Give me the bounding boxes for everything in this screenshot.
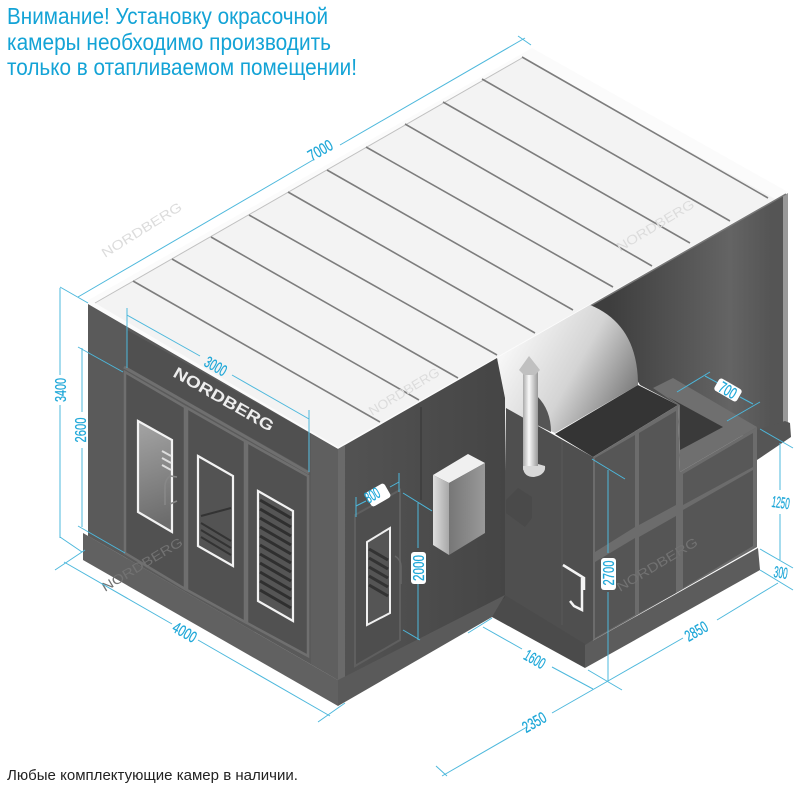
handle bracket xyxy=(563,565,584,610)
dimension: 300 xyxy=(760,564,793,590)
small junction box xyxy=(506,488,532,527)
dimension: 1600 xyxy=(468,618,593,689)
dimension: 1600: 1600 xyxy=(520,647,548,673)
box base xyxy=(490,590,585,668)
dimension: 700 xyxy=(677,372,760,421)
back wall interior xyxy=(590,193,791,460)
dimension: 7000: 7000 xyxy=(305,137,336,165)
icon: exhaust pipe with arrow xyxy=(519,356,545,477)
window 2 xyxy=(198,456,233,566)
right wall of booth xyxy=(338,356,551,706)
dimension: 800 xyxy=(356,473,399,517)
dimension: 4000 xyxy=(55,550,345,722)
watermarks xyxy=(99,196,700,595)
box right face xyxy=(585,405,757,645)
watermarks: NORDBERG xyxy=(614,196,697,255)
dimension: 700: 700 xyxy=(715,379,739,403)
dimension: 4000: 4000 xyxy=(169,619,199,647)
filter box xyxy=(490,378,760,668)
side door xyxy=(355,490,400,666)
box left face xyxy=(503,408,593,648)
window 1 xyxy=(138,421,172,532)
front wall xyxy=(83,304,338,706)
heading: installation warning: камеры необходимо производить xyxy=(7,29,331,55)
watermarks: NORDBERG xyxy=(99,534,185,595)
dimension: 2600 xyxy=(73,347,125,553)
window 3 xyxy=(258,491,293,621)
dimension: 2850: 2850 xyxy=(682,619,711,645)
dimension: 2350 xyxy=(436,681,608,776)
ledge xyxy=(653,378,757,472)
dimension: 2350: 2350 xyxy=(520,709,550,737)
dimension: 300: 300 xyxy=(773,564,789,583)
door handle xyxy=(165,476,177,505)
watermarks: NORDBERG xyxy=(614,534,700,595)
dimension: 3000 xyxy=(127,308,309,472)
watermarks: NORDBERG xyxy=(366,365,442,419)
duct flange xyxy=(537,396,551,432)
dimension: 7000 xyxy=(78,36,531,297)
caption: Любые комплектующие камер в наличии. xyxy=(7,767,298,784)
dimension: 3400 xyxy=(53,287,88,552)
base plinth xyxy=(83,533,338,706)
logo: NORDBERG: NORDBERG xyxy=(170,365,277,435)
icon: electrical cabinet xyxy=(433,454,485,555)
heading: installation warning: только в отапливаемом помещении! xyxy=(7,54,357,80)
door transom panel xyxy=(127,330,308,470)
dimension: 2000: 2000 xyxy=(411,555,428,581)
side door handle xyxy=(395,556,401,584)
side door window xyxy=(367,528,390,625)
dimension: 1250 xyxy=(760,429,793,568)
dimension: 3000: 3000 xyxy=(201,354,230,380)
heading: installation warning xyxy=(7,3,357,80)
dimension: 2850 xyxy=(588,583,778,690)
dimension: 3400: 3400 xyxy=(53,378,70,402)
dimension: 2700 xyxy=(592,459,625,681)
corner strip xyxy=(311,434,338,680)
duct cylinder xyxy=(497,305,638,433)
roof with ribs xyxy=(85,48,788,449)
dimension: 2000 xyxy=(403,493,432,640)
dimension: 2600: 2600 xyxy=(73,417,90,442)
dimension: 2700: 2700 xyxy=(601,560,618,586)
heading: installation warning: Внимание! Установку окрасочной xyxy=(7,3,328,29)
dimension: 800: 800 xyxy=(362,485,384,507)
box top opening xyxy=(555,385,678,457)
watermarks: NORDBERG xyxy=(99,199,185,261)
door frame and leaves xyxy=(125,372,308,656)
